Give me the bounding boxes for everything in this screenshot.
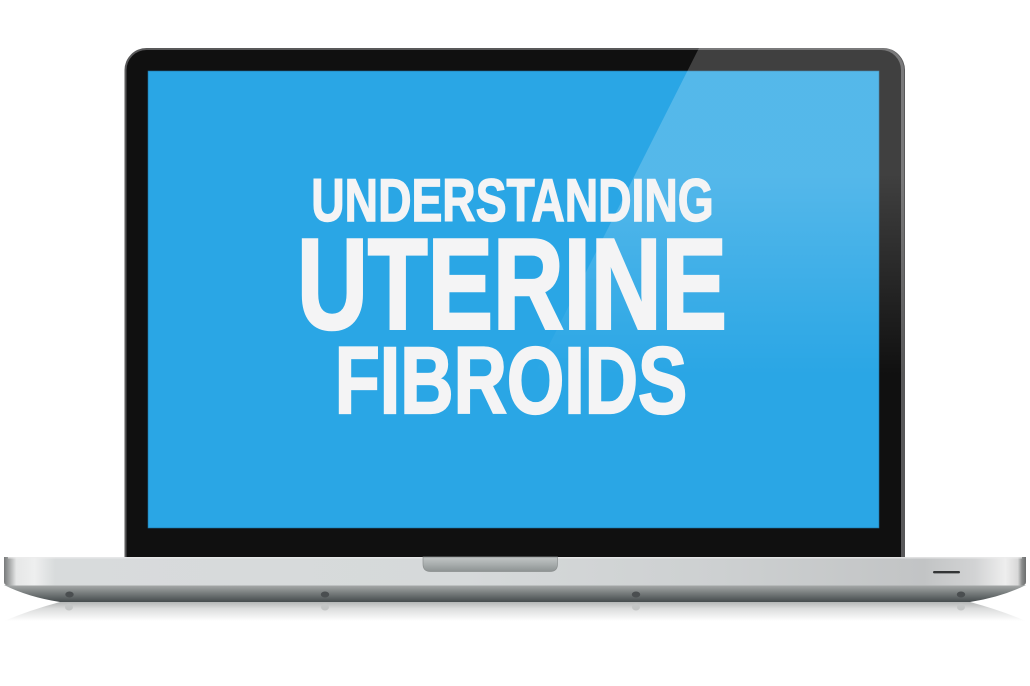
laptop lid (124, 48, 905, 557)
reflection (4, 602, 1026, 621)
trackpad notch (423, 557, 558, 572)
rubber feet (65, 592, 965, 598)
deck (4, 557, 1026, 586)
heading line: uterine: UTERINE (297, 212, 727, 356)
screen (148, 71, 879, 528)
heading line: fibroids: FIBROIDS (335, 328, 687, 434)
indicator slot (933, 571, 960, 573)
screen glare (555, 48, 904, 340)
heading line: understanding: UNDERSTANDING (311, 167, 714, 234)
underside (4, 585, 1026, 602)
laptop base (4, 557, 1026, 621)
foot reflections (65, 604, 965, 610)
title: understanding uterine fibroids (297, 167, 727, 434)
